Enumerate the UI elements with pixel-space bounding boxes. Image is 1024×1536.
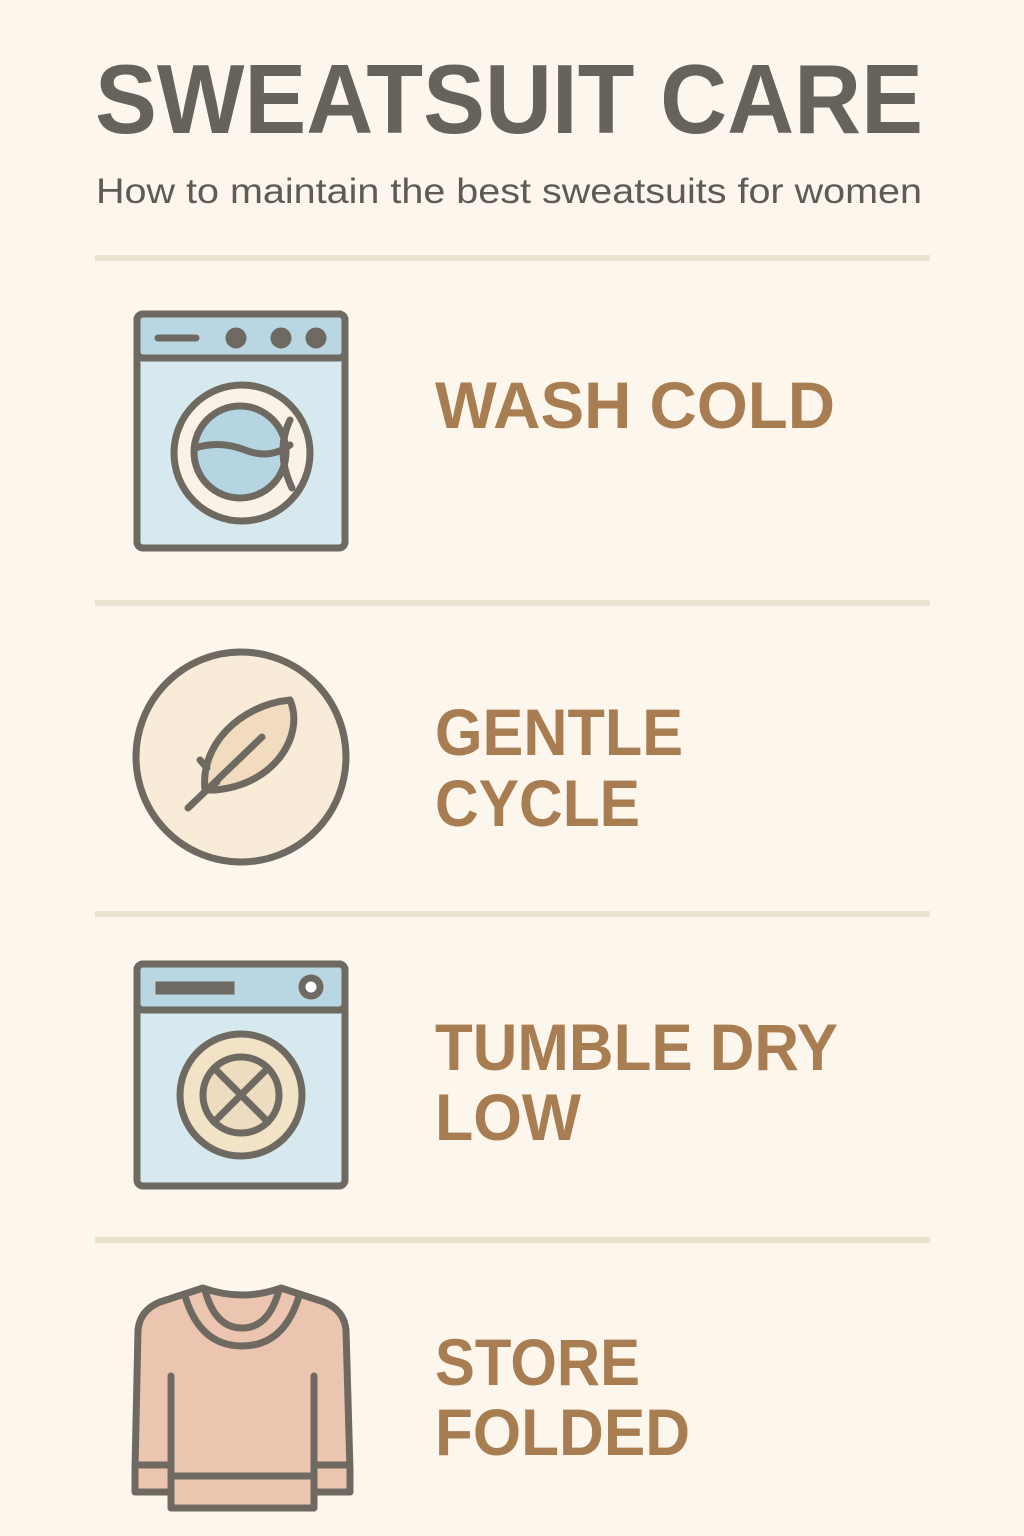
icon: dryer (tumble dry low) — [137, 964, 345, 1186]
title: SWEATSUIT CARE — [95, 44, 923, 154]
label: gentle cycle: GENTLE — [435, 695, 683, 769]
label: tumble dry low: LOW — [435, 1080, 582, 1154]
label: store folded: FOLDED — [435, 1395, 690, 1469]
label: gentle cycle: CYCLE — [435, 766, 640, 840]
icon: feather (gentle cycle) — [136, 652, 346, 862]
icon: washing machine (wash cold) — [137, 314, 345, 548]
label: store folded: STORE — [435, 1325, 640, 1399]
icon: sweater (store folded) — [135, 1288, 350, 1508]
label: gentle cycle — [435, 695, 683, 840]
label: tumble dry low: TUMBLE DRY — [435, 1010, 838, 1084]
label: store folded — [435, 1325, 690, 1469]
subtitle: How to maintain the best sweatsuits for women — [96, 172, 922, 211]
label: wash cold: WASH COLD — [435, 368, 835, 442]
label: tumble dry low — [435, 1010, 838, 1154]
